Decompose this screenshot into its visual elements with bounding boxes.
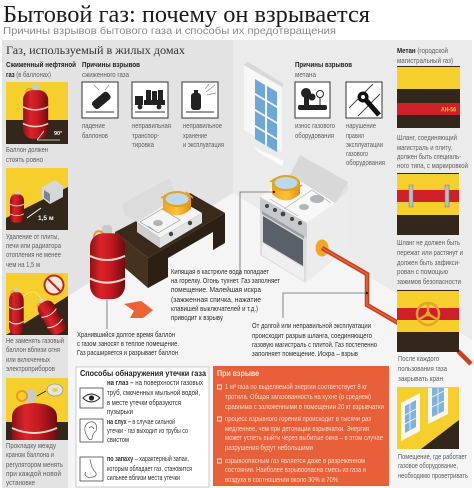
caption: hose clamps	[397, 238, 463, 286]
bullet: combustion speed: может успеть выйти через выбитые окна – в этом случае	[225, 433, 383, 442]
caption: hose clamps: рован с помощью	[397, 267, 448, 276]
text: stored cylinder explanation: Хранившийся долгое время баллон	[77, 330, 175, 339]
caption: equipment wear	[295, 121, 335, 140]
icon: falling cylinder	[82, 82, 118, 118]
heading: methane	[397, 46, 453, 65]
caption: cylinder upright: Баллон должен	[6, 145, 48, 154]
illustration: big gas cylinder	[90, 225, 125, 299]
caption: distance from stove: печи или радиатора	[6, 241, 62, 250]
caption: cylinder upright	[6, 145, 48, 164]
caption: no fire nearby	[6, 336, 64, 373]
card: no fire nearby	[6, 273, 68, 337]
heading: liquefied petroleum gas: Сжиженный нефтяной	[6, 60, 76, 69]
leak detection heading: Способы обнаружения утечки газа	[80, 369, 206, 378]
bullet: combustion speed: разрушения будут небольшими	[225, 443, 313, 452]
caption: improper transportation: тировка	[132, 140, 155, 149]
text: by hearing	[107, 417, 188, 444]
explosion heading: При взрыве	[217, 369, 259, 378]
card: marked hose	[397, 66, 460, 128]
text: by smell: сильнее вблизи места утечки	[107, 473, 180, 482]
caption: distance from stove: отопления не менее	[6, 250, 61, 259]
heading: causes methane: Причины взрывов	[295, 60, 352, 69]
heading: causes methane	[295, 60, 352, 79]
card: valve wheel	[397, 290, 459, 352]
caption: wrench violation: правил	[346, 131, 364, 140]
caption: gasket replacement: при каждой новой	[6, 469, 61, 478]
caption: improper storage: неправильное	[183, 121, 222, 130]
icon: eye	[80, 388, 103, 408]
icon: equipment wear	[295, 82, 330, 118]
illustration: gas cooker	[260, 155, 348, 283]
card: marked hose: АН-56	[441, 108, 457, 114]
arrow: orange pointer	[124, 301, 153, 318]
text: stored cylinder explanation: с газом заносят в теплое помещение.	[77, 339, 179, 348]
caption: marked hose	[397, 133, 468, 170]
caption: marked hose: Шланг, соединяющий	[397, 133, 457, 142]
text: by sight: труб, смоченных мыльной водой,	[107, 388, 200, 397]
caption: gasket replacement: регулятором менять	[6, 460, 63, 469]
caption: hose clamps: зажимов безопасности	[397, 277, 461, 286]
bullet: combustion speed: процесс взрывного горения происходит в тысячи раз	[225, 414, 372, 423]
causes of explosion: liquefied gas	[82, 60, 224, 149]
caption: falling cylinder: баллонов	[82, 131, 108, 140]
caption: hose clamps: должен быть зафикси-	[397, 258, 460, 267]
left column: liquefied gas rules	[6, 60, 76, 487]
caption: hose clamps: Шланг не должен быть	[397, 238, 460, 247]
heading: causes liquefied gas	[82, 60, 140, 79]
heading: causes methane: метана	[295, 70, 317, 79]
card: distance from stove	[6, 168, 68, 230]
caption: no fire nearby: электроприборов	[6, 364, 55, 373]
text: hose rupture explanation: газовую магистраль с плитой. Газ постепенно	[252, 340, 377, 349]
heading: liquefied petroleum gas	[6, 60, 76, 79]
text: hose rupture explanation: заполняет помещение. Искра – взрыв	[252, 349, 358, 358]
caption: gasket replacement: краном баллона и	[6, 450, 54, 459]
caption: no fire nearby: или включенных	[6, 355, 50, 364]
text: by hearing: свистом	[107, 435, 129, 444]
text: by hearing: утечки - газ выходит из трубы со	[107, 426, 188, 435]
icon: ear	[80, 419, 103, 442]
leader line from cylinder	[106, 300, 108, 329]
bullet: energy equivalent: сравнима с заложенными в помещении 20 кг взрывчатки	[225, 402, 384, 411]
caption: cylinder upright: стоять ровно	[6, 155, 43, 164]
text: by sight: пузырьки	[107, 407, 133, 416]
text: boiling water explanation: помещение. Малейшая искра	[171, 285, 262, 294]
caption: gasket replacement: Прокладку между	[6, 441, 56, 450]
text: hose rupture explanation: происходит разрыв шланга, соединяющего	[252, 331, 372, 340]
text: boiling water explanation	[171, 267, 280, 322]
caption: wrench violation	[346, 121, 385, 167]
bullet: energy equivalent: 1 м³ газа по выделяемой энергии соответствует 8 кг	[225, 382, 367, 391]
caption: distance from stove	[6, 232, 62, 269]
subtitle: Причины взрывов бытового газа и способы их предотвращения	[3, 25, 336, 37]
icon: improper transportation	[132, 82, 168, 118]
illustration: camping stove on table	[115, 178, 225, 288]
card: gasket replacement	[6, 378, 68, 440]
bullet: energy equivalent	[218, 382, 384, 411]
caption: equipment wear: износ газового	[295, 121, 335, 130]
caption: improper transportation: транспор-	[132, 131, 159, 140]
pot on cooker	[270, 175, 302, 200]
panel: during explosion	[213, 366, 389, 486]
bullet: combustion speed: медленнее, чем при детонации взрывчатки. Энергия	[225, 424, 369, 433]
bullet: explosive mixture	[218, 456, 366, 484]
text: by smell: по запаху – характерный запах,	[107, 454, 189, 463]
bullet: combustion speed	[218, 414, 383, 452]
text: boiling water explanation: (зажженная спичка, нажатие	[171, 295, 261, 304]
title: Бытовой газ: почему он взрывается	[3, 1, 370, 28]
right column: methane rules	[397, 46, 468, 480]
text: stored cylinder explanation: Газ расширяется и разрывает баллон	[77, 348, 178, 357]
heading: liquefied petroleum gas: газ (в баллонах)	[6, 70, 51, 79]
card: cylinder upright	[6, 82, 68, 144]
text: by sight	[107, 378, 203, 416]
panel: leak detection methods	[76, 367, 209, 487]
caption: improper transportation	[132, 121, 171, 149]
text: by sight: на глаз – на поверхности газовых	[107, 378, 203, 387]
caption: equipment wear: оборудования	[295, 131, 334, 140]
card: cylinder upright: 90°	[54, 131, 62, 137]
text: hose rupture explanation	[252, 321, 377, 358]
icon: improper storage	[182, 82, 218, 118]
card: distance from stove: 1,5 м	[38, 215, 54, 222]
bullet: explosive mixture: воздуха в соотношении около 30% и 70%	[225, 475, 338, 484]
caption: wrench violation: оборудования	[346, 158, 385, 167]
card: ventilate room	[397, 387, 459, 449]
illustration: window	[244, 62, 284, 166]
heading: methane: Метан (городской	[397, 46, 448, 55]
caption: improper storage	[183, 121, 224, 149]
caption: wrench violation: эксплуатации	[346, 140, 383, 149]
card: hose clamps	[397, 173, 459, 235]
caption: marked hose: магистраль и плиту,	[397, 143, 452, 152]
caption: wrench violation: газового	[346, 149, 368, 158]
caption: falling cylinder	[82, 121, 108, 140]
caption: gasket replacement: установке	[6, 478, 35, 487]
caption: no fire nearby: баллон вблизи огня	[6, 345, 60, 354]
heading: methane: магистральный газ)	[397, 56, 453, 65]
caption: valve wheel: После каждого	[398, 354, 439, 363]
caption: no fire nearby: Не заменять газовый	[6, 336, 64, 345]
text: boiling water explanation: приводит к взрыву	[171, 313, 223, 322]
caption: gasket replacement	[6, 441, 63, 487]
bullet: explosive mixture: состоянии. Наиболее взрывоопасна смесь из газа и	[225, 465, 366, 474]
caption: valve wheel: закрывать кран	[398, 374, 443, 383]
text: boiling water explanation: на горелку. Огонь тухнет. Газ заполняет	[171, 276, 280, 285]
pot on camping stove	[161, 191, 193, 216]
icon: nose	[80, 457, 103, 481]
leader line from hose	[283, 292, 368, 318]
caption: improper storage: хранение	[183, 131, 207, 140]
text: by smell	[107, 454, 192, 482]
text: by hearing: на слух – в случае сильной	[107, 417, 175, 426]
icon: wrench violation	[346, 82, 382, 118]
text: boiling water explanation: клавишей выключателей и т.д.)	[171, 304, 258, 313]
text: hose rupture explanation: От долгой или неправильной эксплуатации	[252, 321, 371, 330]
panel heading: Газ, используемый в жилых домах	[6, 43, 185, 57]
heading: causes liquefied gas: сжиженного газа	[82, 70, 130, 79]
caption: wrench violation: нарушение	[346, 121, 376, 130]
text: by sight: в месте утечки образуются	[107, 398, 181, 407]
caption: distance from stove: Удаление от плиты,	[6, 232, 59, 241]
caption: distance from stove: чем на 1,5 м	[6, 260, 40, 269]
text: stored cylinder explanation	[77, 330, 179, 357]
caption: valve wheel: пользования газа	[398, 364, 448, 373]
caption: improper storage: и эксплуатация	[183, 140, 224, 149]
caption: improper transportation: неправильная	[132, 121, 171, 130]
caption: valve wheel	[398, 354, 448, 383]
gas hose	[316, 240, 471, 364]
text: boiling water explanation: Кипящая в кастрюле вода попадает	[171, 267, 269, 276]
text: by smell: которым обладает газ, становится	[107, 464, 192, 473]
caption: ventilate room	[398, 452, 468, 480]
bullet: explosive mixture: взрывоопасным газ является даже в разреженном	[225, 456, 365, 465]
heading: causes liquefied gas: Причины взрывов	[82, 60, 140, 69]
causes of explosion: methane	[295, 60, 385, 167]
leader line from cooker pot	[240, 191, 275, 275]
bullet: energy equivalent: тротила. Общая загазованность на кухне (в среднем)	[225, 392, 371, 401]
caption: falling cylinder: падение	[82, 121, 105, 130]
